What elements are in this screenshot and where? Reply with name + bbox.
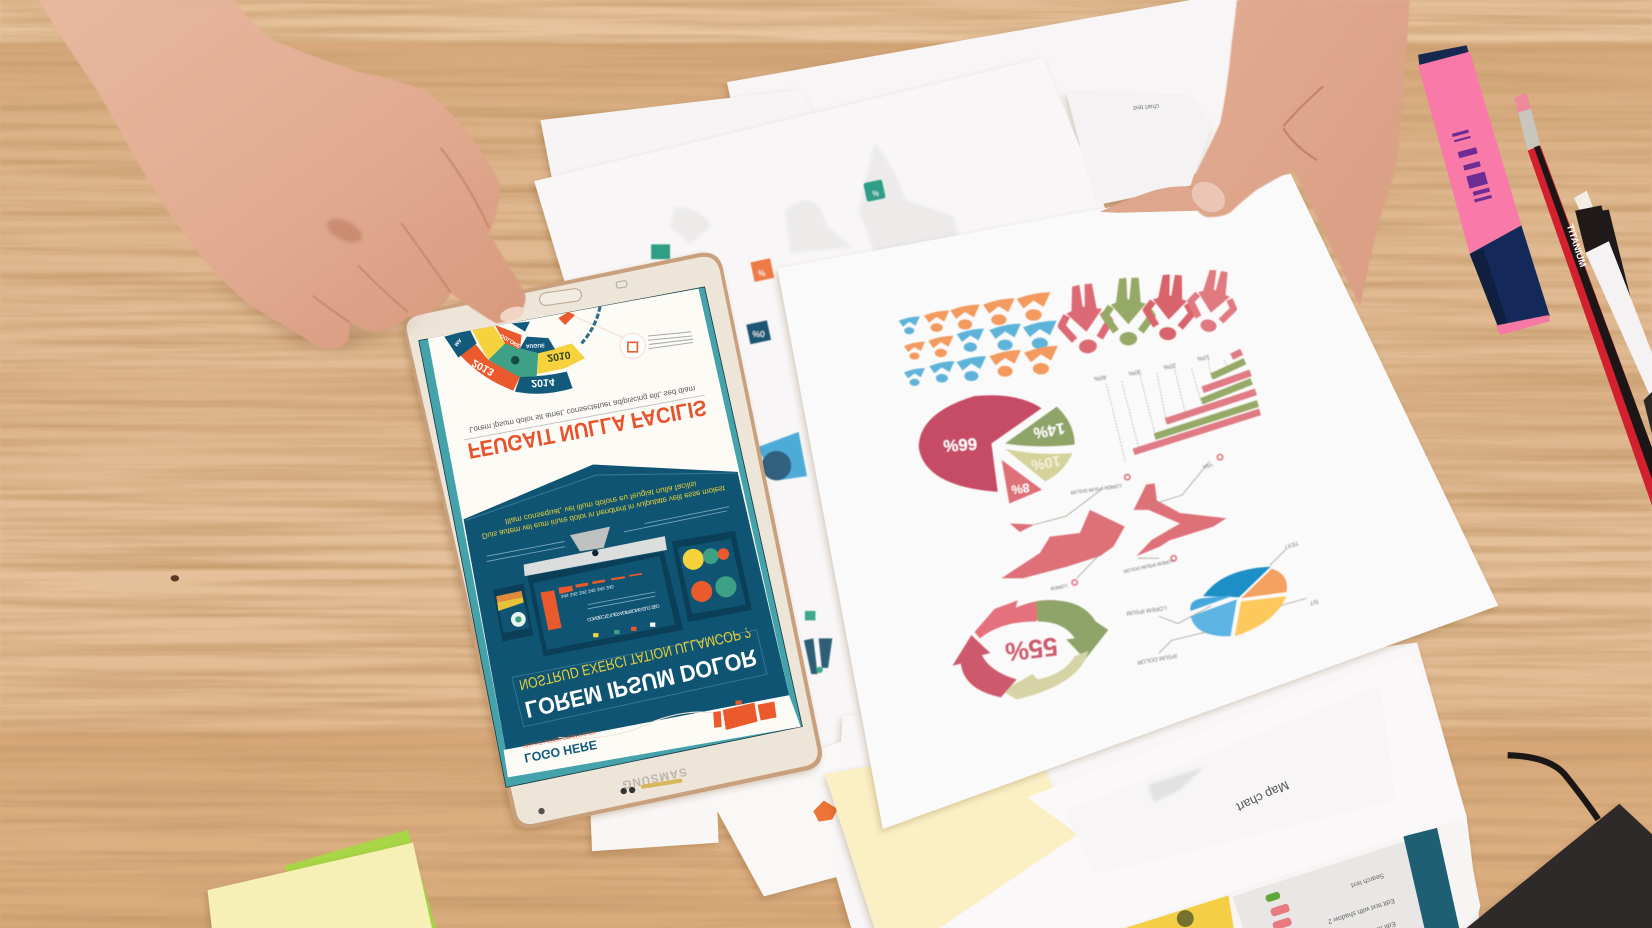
subtitle: Lorem ipsum dolor sit amet, consectetuer adipiscing elit, sed diam xyxy=(468,384,696,435)
small coloured pie xyxy=(1126,539,1319,665)
tablet xyxy=(403,253,822,828)
phone device xyxy=(493,584,533,641)
wheel chart: 2010 xyxy=(546,348,571,364)
heading: FEUGAIT NULLA FACILIS xyxy=(466,395,709,464)
small green tag xyxy=(805,611,815,620)
wheel chart: MA xyxy=(453,337,463,347)
world map chart xyxy=(1001,455,1226,591)
toggles xyxy=(1265,891,1293,928)
value labels: 14% xyxy=(1032,419,1066,441)
yellow intro: Duis autem vel eum iriure dolor in hendrerit in vulputate velit esse molest xyxy=(481,483,726,541)
lower papers xyxy=(590,643,1480,928)
screen: NOSTRUD EXERCI TATION ULLAMCOP ? xyxy=(517,623,752,692)
thumbnail xyxy=(498,304,526,324)
tag: green xyxy=(863,179,886,202)
slice: 14% xyxy=(1005,407,1075,446)
bar chart: 40% xyxy=(1093,373,1107,382)
bar chart: 30% xyxy=(1128,368,1142,377)
wheel chart: AUGUE xyxy=(526,342,545,348)
pie chart: 66 14 10 8 percent xyxy=(919,395,1075,504)
sticky note: green back xyxy=(284,830,436,928)
pen xyxy=(1574,191,1652,434)
small white notes xyxy=(487,507,729,561)
knuckle shade xyxy=(323,214,366,247)
world map chart: USA xyxy=(1201,462,1213,469)
tag: orange: % xyxy=(758,268,766,278)
screen xyxy=(418,287,803,788)
tablet controls xyxy=(538,778,683,814)
screen: TAGLINE LOREM IPSUM DOLOR xyxy=(522,729,596,749)
label: sheet caption: chart text xyxy=(1133,102,1159,111)
navy section xyxy=(464,465,789,750)
finger creases xyxy=(313,147,489,322)
ribbon xyxy=(1508,755,1598,820)
grey world map xyxy=(670,142,959,253)
world map chart: LOREM xyxy=(1050,582,1068,591)
circular arrows: 55 percent xyxy=(952,600,1108,699)
left hand xyxy=(38,0,526,350)
pie callouts xyxy=(1159,550,1306,653)
brand: SAMSUNG xyxy=(620,765,688,791)
tag: navy: %0 xyxy=(752,329,765,339)
right hand creases xyxy=(1283,86,1323,160)
slice: 66% xyxy=(919,395,1042,492)
slice: 10% xyxy=(1005,449,1073,481)
logo: LOGO HERE xyxy=(523,737,598,765)
screen: LOREM IPSUM DOLOR xyxy=(523,644,760,723)
yellow intro: Illam consequat, vel illum dolore eu feugiat nulla facilisi xyxy=(504,479,697,526)
tag: orange xyxy=(750,258,774,282)
dashed arc and icon xyxy=(558,307,645,359)
value labels: 10% xyxy=(1030,452,1062,473)
partial blue chart xyxy=(756,432,807,480)
large people pictogram xyxy=(1057,267,1240,356)
wheel chart: 2014 xyxy=(531,376,555,389)
slice: 8% xyxy=(1002,460,1042,504)
tag: green: % xyxy=(872,189,879,198)
value labels: 66% xyxy=(943,434,978,455)
wheel chart xyxy=(444,322,585,394)
teal band xyxy=(1403,828,1459,928)
tag: navy xyxy=(746,320,771,344)
orange skyline icon xyxy=(713,700,776,730)
map callouts xyxy=(1035,461,1210,578)
panel: main infographic sheet xyxy=(778,174,1498,829)
caption: Map chart: Map chart xyxy=(1234,778,1291,814)
small people xyxy=(804,638,832,674)
bar chart: 20% xyxy=(1163,361,1177,371)
monitor device xyxy=(524,527,683,656)
dotted mark xyxy=(1148,767,1204,803)
barcode and print xyxy=(1452,130,1492,203)
orange fragment xyxy=(813,801,838,822)
wheel chart: DOLORE xyxy=(499,332,522,349)
back paper: left sheet xyxy=(540,90,843,184)
black notebook xyxy=(1467,755,1652,928)
pencil brand: TITANIUM xyxy=(1564,223,1588,269)
lower right app sheet xyxy=(1117,816,1480,928)
setting labels: Search text xyxy=(1350,871,1385,889)
tablet device graphic xyxy=(672,531,752,622)
back paper: top sheet xyxy=(727,0,1248,179)
bar chart xyxy=(1093,352,1260,461)
wheel labels: 2013 xyxy=(470,357,496,378)
yellow photo fragment xyxy=(1125,895,1234,928)
plug icon xyxy=(511,356,519,364)
pale yellow note under sheets xyxy=(825,737,1078,928)
setting labels xyxy=(1327,871,1396,928)
value labels xyxy=(943,419,1066,497)
small people pictogram xyxy=(899,292,1058,386)
world map chart: LOREM IPSUM DOLOR xyxy=(1069,482,1122,495)
monitor device: CONSECTETUER ADIPISCING ELIT, SED xyxy=(586,602,661,622)
tag: teal xyxy=(651,244,670,259)
tags on map sheet xyxy=(651,179,886,674)
small coloured pie: SIT xyxy=(1309,598,1319,605)
label: 55%: 55% xyxy=(1004,631,1059,667)
bottom strip xyxy=(504,695,801,777)
back paper: world map sheet xyxy=(534,58,1212,843)
small coloured pie: IPSUM DOLOR xyxy=(1137,652,1177,665)
pencil xyxy=(1514,93,1652,506)
home button and camera xyxy=(539,288,582,306)
small coloured pie: TEXT xyxy=(1283,539,1299,550)
dark knot in wood xyxy=(171,575,179,581)
right thumbnail xyxy=(1186,175,1231,218)
world map chart: LOREM IPSUM DOLOR xyxy=(1122,557,1174,574)
setting labels: Edit text with shadow 2 xyxy=(1327,897,1395,925)
monitor device: 345 345 345 345 345 345 xyxy=(560,583,615,599)
bar chart: 10% xyxy=(1196,353,1210,362)
value labels: 8% xyxy=(1010,480,1030,497)
hero titles xyxy=(512,630,767,727)
sticky note: yellow front xyxy=(208,843,432,928)
small coloured pie: LOREM IPSUM xyxy=(1126,604,1167,616)
right hand xyxy=(1100,0,1410,307)
highlighter xyxy=(1418,45,1550,335)
icon caption xyxy=(648,332,693,349)
sheet: Map chart xyxy=(940,653,1467,928)
